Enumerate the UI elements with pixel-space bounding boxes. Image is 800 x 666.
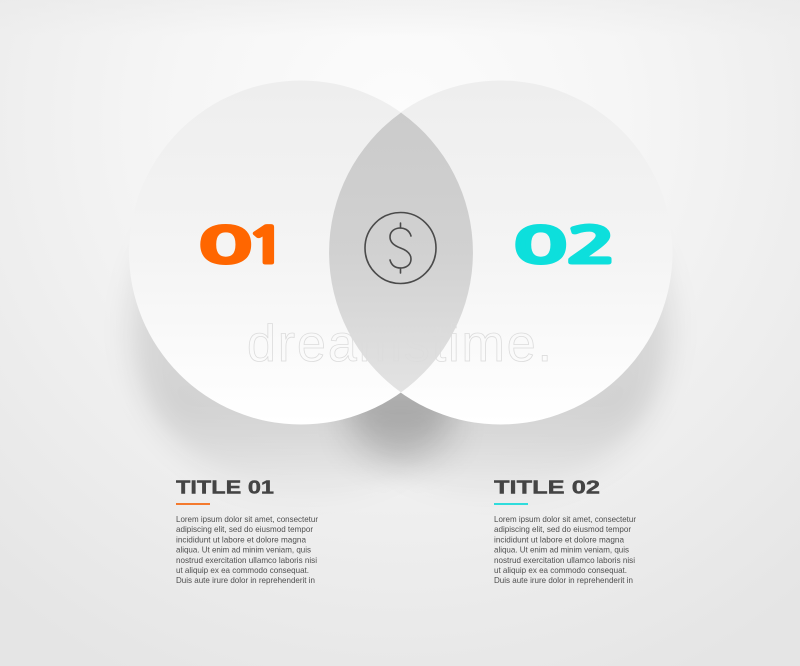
accent line 01	[176, 503, 210, 505]
text block 01: Lorem ipsum dolor sit amet, consectetur	[176, 514, 318, 524]
text block 01: aliqua. Ut enim ad minim veniam, quis	[176, 545, 311, 555]
panel: overlap lens	[329, 113, 473, 392]
title 02: TITLE 02	[494, 478, 600, 498]
text block 01: ut aliquip ex ea commodo consequat.	[176, 565, 309, 575]
title 01: TITLE 01	[176, 478, 274, 498]
text block 02: adipiscing elit, sed do eiusmod tempor	[494, 524, 631, 534]
panel: circle 02	[328, 80, 672, 424]
text block 01: incididunt ut labore et dolore magna	[176, 534, 306, 544]
text block 01: adipiscing elit, sed do eiusmod tempor	[176, 524, 313, 534]
number 01: 1	[246, 223, 288, 271]
text block 02: incididunt ut labore et dolore magna	[494, 534, 624, 544]
panel: circle 01	[129, 80, 473, 424]
text block 02: nostrud exercitation ullamco laboris nisi	[494, 555, 635, 565]
number 02: 2	[566, 223, 616, 271]
number 02: 0	[513, 223, 568, 271]
text block 01: nostrud exercitation ullamco laboris nisi	[176, 555, 317, 565]
text block 02: aliqua. Ut enim ad minim veniam, quis	[494, 545, 629, 555]
text block 01	[176, 514, 318, 585]
text block 02: Duis aute irure dolor in reprehenderit in	[494, 575, 633, 585]
number 01	[198, 223, 288, 271]
icon: dollar coin	[365, 212, 436, 284]
watermark: dreamstime.	[247, 315, 552, 373]
number 02	[513, 223, 616, 271]
text block 02: Lorem ipsum dolor sit amet, consectetur	[494, 514, 636, 524]
accent line 02	[494, 503, 528, 505]
text block 02	[494, 514, 636, 585]
circle shadows	[131, 153, 670, 497]
number 01: 0	[198, 223, 253, 271]
text block 01: Duis aute irure dolor in reprehenderit in	[176, 575, 315, 585]
text block 02: ut aliquip ex ea commodo consequat.	[494, 565, 627, 575]
